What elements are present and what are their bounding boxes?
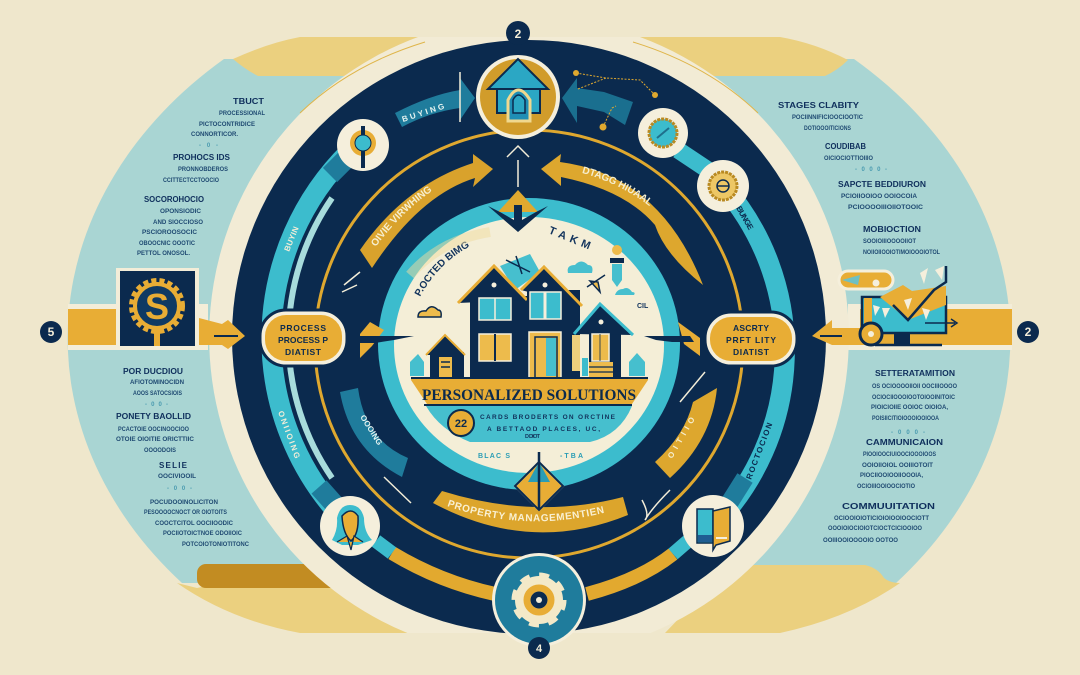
gold arc segments: bottom: [376, 541, 688, 594]
callout: cyan note under banner: 22: [455, 418, 467, 430]
side arc labels: BUYIN: [283, 225, 301, 253]
text block: right lower: OOIOIIOIOL OOIIIOTOIT: [862, 463, 933, 469]
icon: dollar gear box: S: [145, 286, 169, 327]
arrow: top left gold viewing: [360, 154, 493, 268]
top diamond marker: [488, 190, 548, 232]
badge: right number 2: [1017, 321, 1039, 343]
text block: right lower: POISIICITIOIOOOIOOIOOA: [872, 416, 940, 422]
text block: right upper: POCIINNIFICIOOCIOOTIC: [792, 115, 864, 121]
pill: left process label: [260, 310, 347, 366]
curved label path: [420, 234, 500, 297]
pill: left process label: PROCESS: [280, 323, 326, 333]
chimney and back roof: [500, 254, 540, 290]
bottom diamond marker: [515, 452, 563, 510]
badge: left number 5: [40, 321, 62, 343]
center disc: cyan ring: [378, 198, 680, 490]
arrow: bottom left teal: OOOING: [358, 413, 384, 447]
text block: right lower: - 0 0 0 -: [891, 430, 925, 436]
cyan ring: right arc: [713, 186, 785, 526]
text block: left upper: PROHOCS IDS: [173, 153, 231, 162]
small labels at base of center disc: -TBA: [560, 453, 583, 460]
text block: right lower: PIOICIOIIE OOIOC OIOIOA,: [871, 405, 948, 411]
text block: left lower: SELIE: [159, 461, 188, 470]
text block: right lower: CAMMUNICAION: [866, 438, 943, 447]
text block: left lower: PCACTOIE OOCINOOCIOO: [118, 427, 189, 433]
callout: cyan note under banner: CARDS BRODERTS ON ORCTINE: [480, 414, 616, 421]
pill: right asset label: ASCRTY: [733, 323, 769, 333]
arrow: bottom left teal: [340, 388, 408, 477]
cream ring: [209, 37, 849, 633]
arrow: top right gold staging: DTAGG HIUAAL: [582, 166, 650, 206]
text block: left lower: POCUDOOINOLICITON: [150, 500, 218, 506]
right small house: [574, 304, 645, 378]
teal segments: left arc: [319, 153, 352, 505]
banner: personalized solutions: [411, 378, 648, 405]
text block: left upper: PETTOL ONOSOL.: [137, 251, 190, 257]
text block: left lower: PESOOOOCNOCT OR OIOTOITS: [144, 510, 227, 516]
text block: right upper: - 0 0 0 -: [855, 167, 887, 173]
node: coin right: [697, 160, 749, 212]
badge: right number 2: 2: [1025, 325, 1032, 339]
side arc labels: BUNGE: [734, 204, 755, 232]
center disc: cream interior: [394, 217, 664, 473]
banner: personalized solutions: PERSONALIZED SOLUTIONS: [422, 387, 636, 404]
second house: [521, 267, 582, 378]
pill: right asset label: [705, 312, 797, 366]
pill: left process label: DIATIST: [285, 347, 322, 357]
thin gold inner ring: [315, 130, 743, 558]
small labels at base of center disc: BLAC S: [478, 453, 510, 460]
arrow: left connector: [199, 318, 276, 349]
text block: right lower: PIOOIOOCIUIOOCIOOOIOOS: [863, 452, 936, 458]
text block: right lower: OCIOIIIOOIOOCIOTIO: [857, 484, 915, 490]
icon: dollar gear box: [116, 268, 199, 349]
text block: left lower: OTOIE OIOITIE ORICTTIIC: [116, 437, 195, 443]
text block: right lower: [823, 369, 957, 544]
small labels at base of center disc: [478, 453, 583, 460]
callout: cyan note under banner: A BETTAOD PLACES, UC,: [487, 426, 600, 433]
teal segment: right lower: [728, 478, 745, 505]
arrow: bottom right gold: OITIIO: [666, 416, 697, 460]
small white curve marks: [342, 146, 705, 520]
side arc labels: ONIIOING: [276, 410, 302, 460]
pill: left process label: PROCESS P: [278, 335, 328, 345]
curved label: protected: P.OCTED BIMG: [414, 242, 469, 296]
cyan link between top right nodes: [678, 150, 708, 170]
text block: left upper: PICTOCONTRIDICE: [199, 122, 255, 128]
side arc labels: ROCTOCION: [744, 421, 774, 481]
arrow: buying: BUYING: [401, 102, 445, 124]
text block: right lower: OCIOCIIOOOIOOTOIOOINITOIC: [872, 395, 956, 401]
badge: top number 2: [506, 21, 530, 45]
text block: left lower: POTCOIOTONIOTITONC: [182, 542, 250, 548]
navy main disc: [232, 40, 826, 634]
arrow: right connector into disc: [785, 335, 812, 337]
icon: chart on monitor: [812, 266, 957, 345]
text block: left upper: [137, 97, 265, 257]
text block: right lower: SETTERATAMITION: [875, 369, 955, 378]
illustration: houses: [410, 254, 645, 378]
text block: left lower: COOCTCITOL OOCIIOODIC: [155, 521, 234, 527]
text block: left lower: - 0 0 -: [145, 402, 168, 408]
icon: paint brush and tools: [587, 245, 624, 292]
text block: right upper: SOOIOIIIOOOOIIOT: [863, 239, 916, 245]
panel: left blue side panel: [68, 59, 529, 583]
text block: left lower: OOOODOIS: [144, 448, 176, 454]
text block: right lower: OOOIOIOCIOIOTCIOCTCICIOOIOO: [828, 526, 922, 532]
cyan ring: left arc: [271, 151, 350, 526]
text block: left upper: PROCESSIONAL: [219, 111, 265, 117]
node: brochure bottom right: [682, 495, 744, 557]
side arc labels: [276, 204, 774, 481]
text block: right upper: NOIIOIIOOIOTIMOIOOOIOTOL: [863, 250, 940, 256]
right marker of center disc: [644, 322, 700, 356]
dark gold bar: bottom left: [197, 564, 347, 588]
node: top home icon: [476, 55, 560, 139]
text block: right upper: SAPCTE BEDDIURON: [838, 180, 926, 189]
text block: right lower: COMMUUITATION: [842, 502, 935, 511]
arrow: right of home icon: [562, 70, 658, 130]
light inner line: left arc: [288, 198, 332, 478]
text block: right upper: PCIOOOOIIIOIIOTOOIC: [848, 205, 924, 211]
gold band: bottom right: [665, 565, 900, 633]
arrow: bottom right gold: [655, 388, 717, 478]
node: badge top right: [638, 108, 688, 158]
text block: right upper: COUDIBAB: [825, 142, 866, 151]
text block: right upper: OICIOCIOTTIOIIIO: [824, 156, 873, 162]
text block: left lower: OOCIVIOOIL: [158, 474, 196, 480]
text block: left lower: PONETY BAOLLID: [116, 412, 191, 421]
label: takm: TAKM: [547, 225, 592, 252]
node: magnifier top left: [337, 119, 389, 171]
text block: right lower: PIOCIIOOIOOIIOOOIA,: [860, 473, 923, 479]
text block: left lower: AFIOTOMINOCIDN: [130, 380, 184, 386]
text block: left upper: TBUCT: [233, 97, 264, 106]
text block: left upper: SOCOROHOCIO: [144, 195, 204, 204]
badge: left number 5: 5: [48, 325, 55, 339]
text block: right upper: [778, 101, 940, 256]
text block: left lower: POR DUCDIOU: [123, 367, 183, 376]
node: person bottom left: [320, 496, 380, 556]
text block: left lower: AOOS SATOCSIOIS: [133, 391, 182, 397]
text block: left upper: AND SIOCCIOSO: [153, 220, 203, 226]
gold band: top left: [233, 37, 430, 76]
text block: left lower: POCIIOTOICTNOE ODOIIOIC: [163, 531, 243, 537]
text block: left upper: - 0 -: [199, 143, 218, 149]
panel: right blue side panel: [529, 59, 1010, 583]
text block: left upper: PRONNOBDEROS: [178, 167, 228, 173]
gold band: top right: [617, 37, 848, 76]
gold band: bottom left: [177, 560, 411, 633]
text block: left upper: OBOOCNIC OOOTIC: [139, 241, 196, 247]
left small house: [410, 335, 465, 378]
text block: left upper: PSCIOROOSOCIC: [142, 230, 198, 236]
text block: right upper: PCIOIIOOIOO OOIOCOIA: [841, 194, 918, 200]
thin gold hairlines on cream ring: [300, 42, 758, 113]
text block: right lower: OS OCIOOOOIIOII OOCIIIOOOO: [872, 384, 957, 390]
pill: right asset label: DIATIST: [733, 347, 770, 357]
badge: bottom number 4: 4: [536, 643, 543, 655]
text block: right upper: DOTIOOOITICIONS: [804, 126, 851, 132]
label: small right: CIL: [637, 303, 649, 310]
text block: left lower: - 0 0 -: [167, 486, 192, 492]
arrow: top right gold staging: [541, 154, 703, 285]
callout: cyan note under banner: [426, 406, 632, 442]
text block: right lower: OCIOOIOIOTICIOIOIOOIOOCIOTT: [834, 516, 929, 522]
callout: cyan note under banner: D DIOT: [525, 434, 541, 440]
text block: left upper: CCITTECTCCTOOCIO: [163, 178, 219, 184]
left marker of center disc: [352, 322, 414, 358]
banner: property management: [433, 491, 628, 532]
left horizontal connector band: [68, 304, 208, 350]
pill: right asset label: PRFT LITY: [726, 335, 776, 345]
badge: top number 2: 2: [515, 27, 522, 41]
text block: left upper: CONNORTICOR.: [191, 132, 238, 138]
text block: right upper: STAGES CLABITY: [778, 101, 860, 110]
right horizontal connector band: [848, 304, 1012, 350]
arrow: top left gold viewing: OIVIE VIRWHING: [372, 186, 432, 246]
banner: property management: PROPERTY MANAGEMENTIEN: [448, 500, 604, 522]
node: gear bottom: [492, 553, 586, 647]
badge: bottom number 4: [528, 637, 550, 659]
text block: left lower: [116, 367, 250, 548]
text block: right lower: OOIIIOOIOOOOIO OOTOO: [823, 538, 898, 544]
text block: left upper: OPONSIODIC: [160, 209, 202, 215]
icon: clouds: [410, 232, 635, 317]
main house: [458, 266, 530, 378]
arrow: buying: [395, 72, 475, 127]
text block: right upper: MOBIOCTION: [863, 225, 921, 234]
